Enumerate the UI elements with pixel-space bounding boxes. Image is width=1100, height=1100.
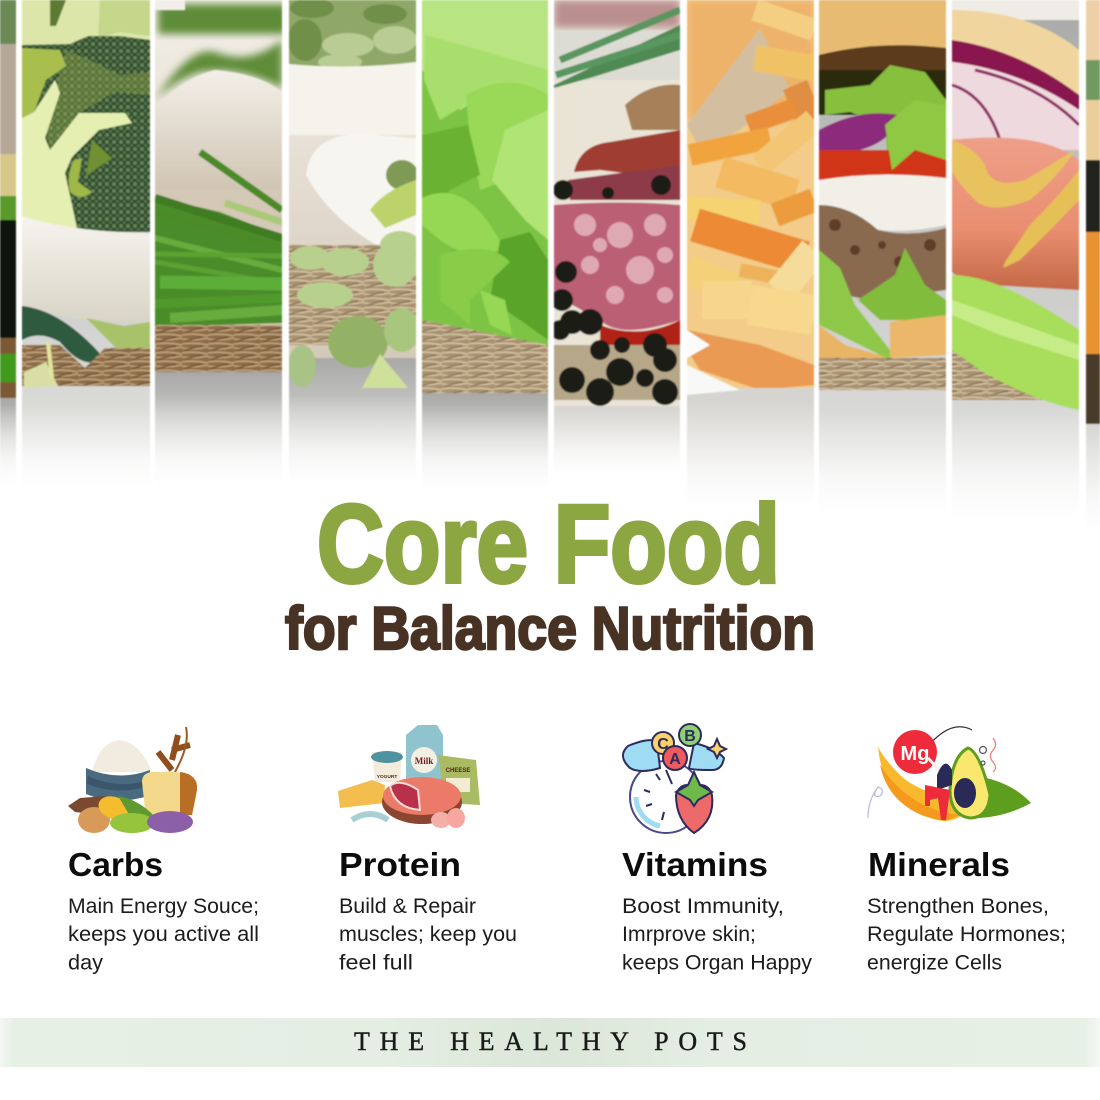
column: protein [338,725,517,974]
heading: Carbs: Carbs [68,847,163,884]
heading: Vitamins: Vitamins [622,847,768,884]
icon: protein foods: CHEESE [446,768,470,774]
description: vitamins: Boost Immunity, [622,894,784,918]
icon: vitamins clock and strawberry [623,724,726,833]
column: minerals [867,727,1066,974]
icon: vitamins clock and strawberry: C [657,736,669,753]
brand name: THE HEALTHY POTS [354,1027,747,1056]
description: vitamins: Imrprove skin; [622,922,756,946]
title: Core Food: Core Food [317,483,780,606]
icon: protein foods: Milk [415,756,433,766]
white fades at the bottom of the strips [0,395,1100,545]
heading: Minerals: Minerals [868,847,1010,884]
icon: vitamins clock and strawberry: B [684,728,696,745]
photo strip collage [0,0,1100,540]
strip: broccoli in white bowl [22,0,150,490]
strip: burger [819,0,946,520]
icon: carbs foods [68,727,197,833]
description: protein: muscles; keep you [339,922,517,946]
icon: minerals with banana and avocado: Mg [901,743,929,765]
icon: protein foods [338,725,480,828]
strip: salami and peppercorns [550,0,680,475]
description: carbs: keeps you active all [68,922,259,946]
strip: french fries [687,0,814,510]
icon: vitamins clock and strawberry: A [669,751,681,768]
icon: minerals with banana and avocado [868,727,1031,821]
strip: mixed edge [1086,0,1100,540]
description: carbs: day [68,950,103,974]
heading: Protein: Protein [339,847,461,884]
strip: hot dog [952,0,1079,525]
description: vitamins: keeps Organ Happy [622,950,812,974]
strip: lettuce [422,0,548,495]
column: vitamins [622,724,812,974]
subtitle: for Balance Nutrition: for Balance Nutrition [285,595,815,662]
description: protein: feel full [339,950,413,974]
description: protein: Build & Repair [339,894,476,918]
column: carbs [68,727,259,974]
description: minerals: Regulate Hormones; [867,922,1066,946]
strip: avocado edge [0,0,16,490]
description: carbs: Main Energy Souce; [68,894,259,918]
strip: green peas and spoon [288,0,420,490]
description: minerals: energize Cells [867,950,1002,974]
strip: chives [155,0,288,490]
footer band [0,1018,1100,1067]
description: minerals: Strengthen Bones, [867,894,1049,918]
icon: protein foods: YOGURT [377,774,397,780]
